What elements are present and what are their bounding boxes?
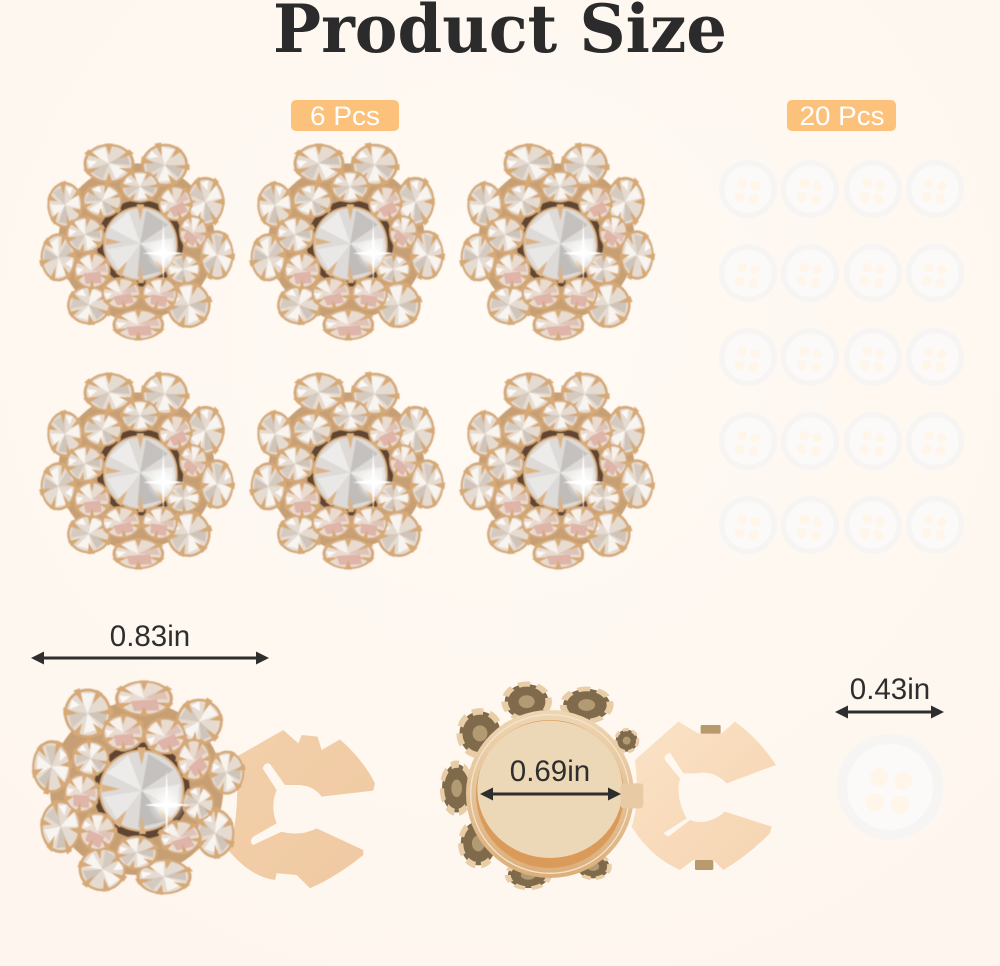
badge: 20 Pcs: 20 Pcs <box>800 101 884 131</box>
dimension: 0.69in label: 0.69in <box>510 755 590 788</box>
clip tabs <box>695 725 721 870</box>
badge: 6 Pcs: 6 Pcs <box>310 101 380 131</box>
clip: front view <box>228 730 375 888</box>
hinge <box>621 783 643 808</box>
clear buttons grid <box>719 160 964 554</box>
metal base <box>466 710 634 878</box>
badge: 6 Pcs <box>291 100 399 131</box>
dimension: 0.83in label: 0.83in <box>110 620 190 653</box>
rhinestone face <box>24 679 250 897</box>
arrow: 0.43in <box>835 706 944 718</box>
rhinestone button covers grid <box>35 135 660 569</box>
stones behind the base <box>442 684 638 888</box>
large clear button <box>837 734 943 840</box>
front view with clip <box>24 679 375 897</box>
clip: back view <box>632 722 776 870</box>
dimension: 0.43in label: 0.43in <box>850 673 930 706</box>
arrow: 0.83in <box>31 652 269 664</box>
back view with clip <box>442 684 776 888</box>
arrow: 0.69in <box>480 788 621 800</box>
